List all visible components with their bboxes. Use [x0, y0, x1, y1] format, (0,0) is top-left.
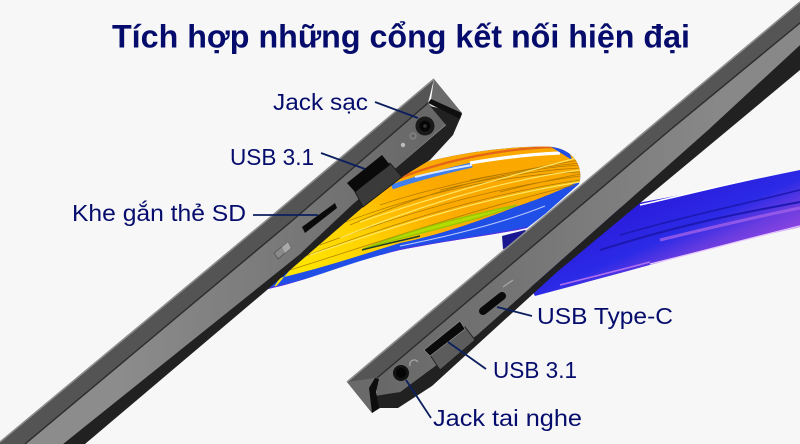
label: Jack sạc: Jack sạc: [273, 89, 368, 115]
right laptop edge: [347, 2, 800, 413]
title: Tích hợp những cổng kết nối hiện đại: [112, 18, 690, 54]
port: SD slot: [302, 203, 337, 233]
laptop port panel: [25, 103, 449, 444]
port: USB Type-C: [483, 296, 502, 311]
laptop black base: [63, 106, 462, 444]
laptop black base: [372, 45, 800, 413]
label: Khe gắn thẻ SD: Khe gắn thẻ SD: [72, 200, 246, 226]
laptop end cap: [347, 378, 375, 413]
label: USB 3.1 right: USB 3.1: [493, 357, 577, 383]
indicator icons: [401, 133, 416, 147]
laptop end cap: [431, 79, 462, 113]
port: USB 3.1: [347, 155, 390, 192]
hinge flap: [430, 327, 475, 370]
panel groove: [377, 23, 800, 378]
icons: headphone and USB symbols: [410, 280, 513, 366]
top edge highlight: [0, 79, 434, 442]
end cap shadow: [369, 378, 379, 413]
hinge flap: [355, 163, 402, 207]
laptop top band: [347, 2, 800, 413]
port: charging jack: [416, 116, 434, 136]
end cap shadow: [428, 99, 462, 119]
laptop port panel: [376, 23, 800, 397]
port: headphone jack: [393, 365, 409, 381]
label: USB 3.1 left: USB 3.1: [230, 144, 314, 170]
laptop top band: [0, 79, 434, 444]
SD lock toggle: [274, 242, 291, 259]
top edge highlight: [347, 2, 800, 382]
left laptop edge: [0, 79, 462, 444]
label: USB Type-C: USB Type-C: [537, 303, 673, 329]
ribbon: yellow and orange paint stroke: [268, 146, 580, 289]
label: Jack tai nghe: Jack tai nghe: [433, 405, 582, 431]
ribbon: blue and purple paint stroke: [502, 170, 800, 296]
panel groove: [25, 103, 428, 444]
port: USB 3.1: [424, 321, 465, 356]
leader lines: [253, 102, 532, 418]
